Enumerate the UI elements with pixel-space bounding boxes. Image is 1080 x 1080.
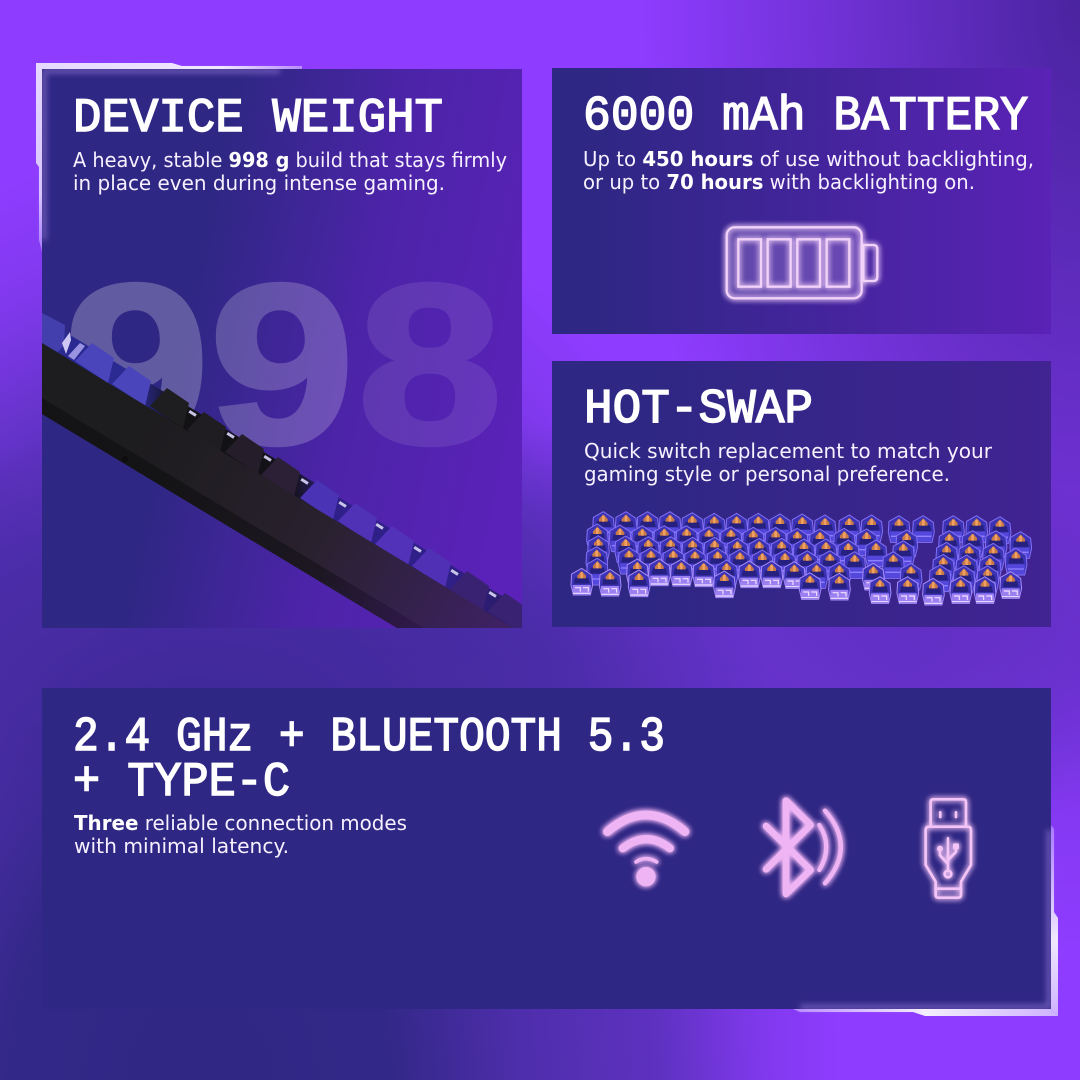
- heading: battery: 6000 mAh BATTERY: [583, 90, 1028, 144]
- text: device weight description: in place even during intense gaming.: [73, 171, 445, 195]
- panel: hot-swap: [552, 361, 1051, 627]
- neon frame: bottom right corner: [793, 825, 1058, 1016]
- heading: connectivity: [73, 711, 665, 810]
- text: hot-swap description: gaming style or personal preference.: [584, 462, 950, 486]
- keyboard side view: [42, 313, 522, 628]
- icon: wifi: [607, 815, 685, 886]
- text: device weight description: A heavy, stable 998 g build that stays firmly: [73, 148, 507, 172]
- heading: hot-swap: HOT-SWAP: [584, 383, 813, 437]
- text: connectivity description: [74, 811, 407, 858]
- watermark number 998: 9: [209, 238, 355, 492]
- neon frame: top left corner: [36, 63, 302, 252]
- watermark number 998: 9: [64, 238, 210, 492]
- panel: battery: [552, 68, 1051, 334]
- image: keyboard switches: [571, 512, 1032, 605]
- text: device weight description: [73, 148, 507, 195]
- panel: connectivity: [42, 688, 1058, 1016]
- text: connectivity description: with minimal latency.: [74, 834, 289, 858]
- text: connectivity description: Three reliable connection modes: [74, 811, 407, 835]
- text: battery description: Up to 450 hours of use without backlighting,: [583, 147, 1034, 171]
- text: battery description: or up to 70 hours with backlighting on.: [583, 170, 975, 194]
- watermark number 998: 8: [357, 238, 503, 492]
- icon: bluetooth: [766, 801, 841, 894]
- text: hot-swap description: Quick switch replacement to match your: [584, 439, 993, 463]
- text: hot-swap description: [584, 439, 993, 486]
- text: battery description: [583, 147, 1034, 194]
- heading: device weight: DEVICE WEIGHT: [73, 92, 443, 146]
- heading: connectivity: + TYPE-C: [73, 756, 290, 810]
- heading: connectivity: 2.4 GHz + BLUETOOTH 5.3: [73, 711, 665, 765]
- icon: usb: [926, 799, 971, 898]
- icon: battery: [727, 227, 877, 298]
- watermark number 998: [70, 282, 497, 448]
- panel: device weight: [36, 63, 530, 660]
